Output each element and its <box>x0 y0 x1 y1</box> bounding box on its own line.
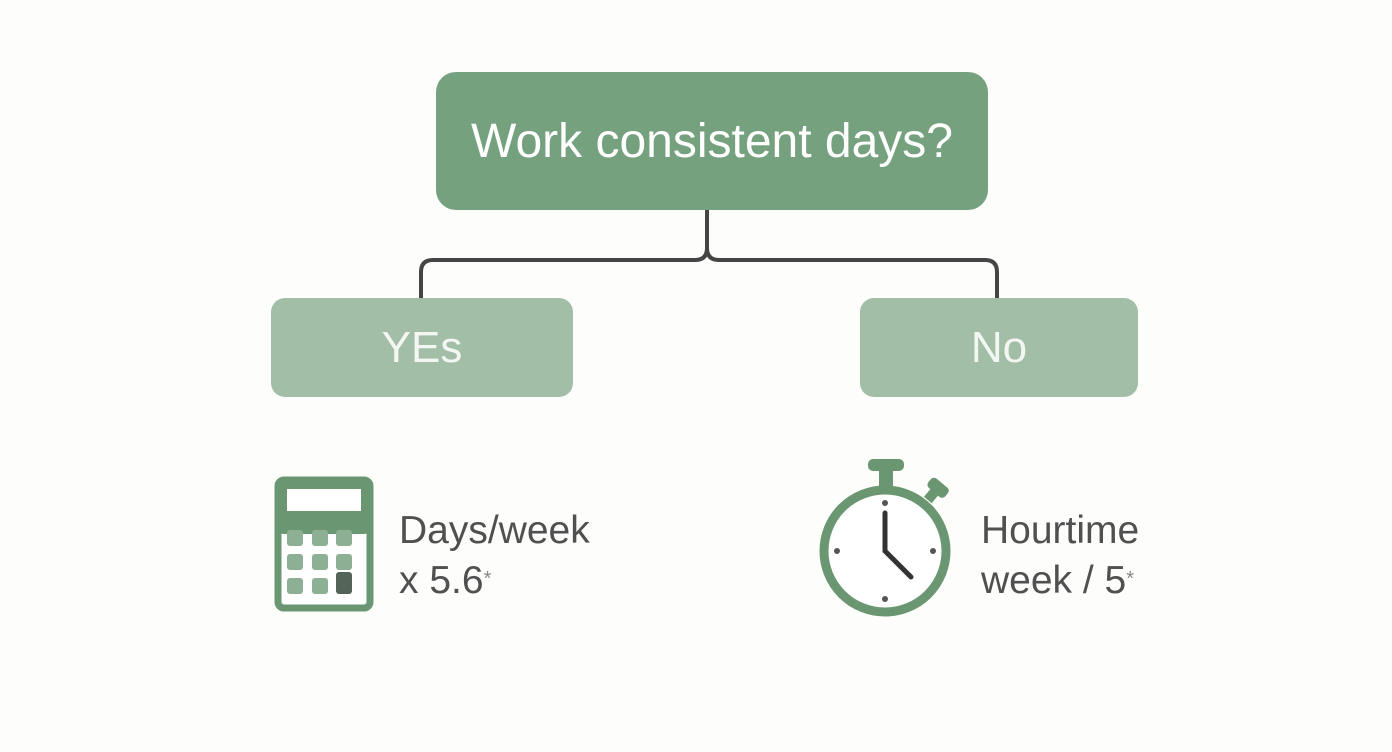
title box: Work consistent days? <box>471 114 953 168</box>
yes box: YEs <box>382 322 462 372</box>
text: hourtime: week / 5* <box>981 559 1134 602</box>
text: days/week <box>399 509 590 602</box>
yes box <box>271 298 573 397</box>
text: hourtime <box>981 509 1139 602</box>
text: days/week: x 5.6* <box>399 559 491 602</box>
title box <box>436 72 988 210</box>
no box <box>860 298 1138 397</box>
icon: calculator <box>274 476 374 612</box>
no box: No <box>971 322 1027 372</box>
text: days/week: Days/week <box>399 509 590 552</box>
text: hourtime: Hourtime <box>981 509 1139 552</box>
icon: stopwatch <box>820 459 950 616</box>
